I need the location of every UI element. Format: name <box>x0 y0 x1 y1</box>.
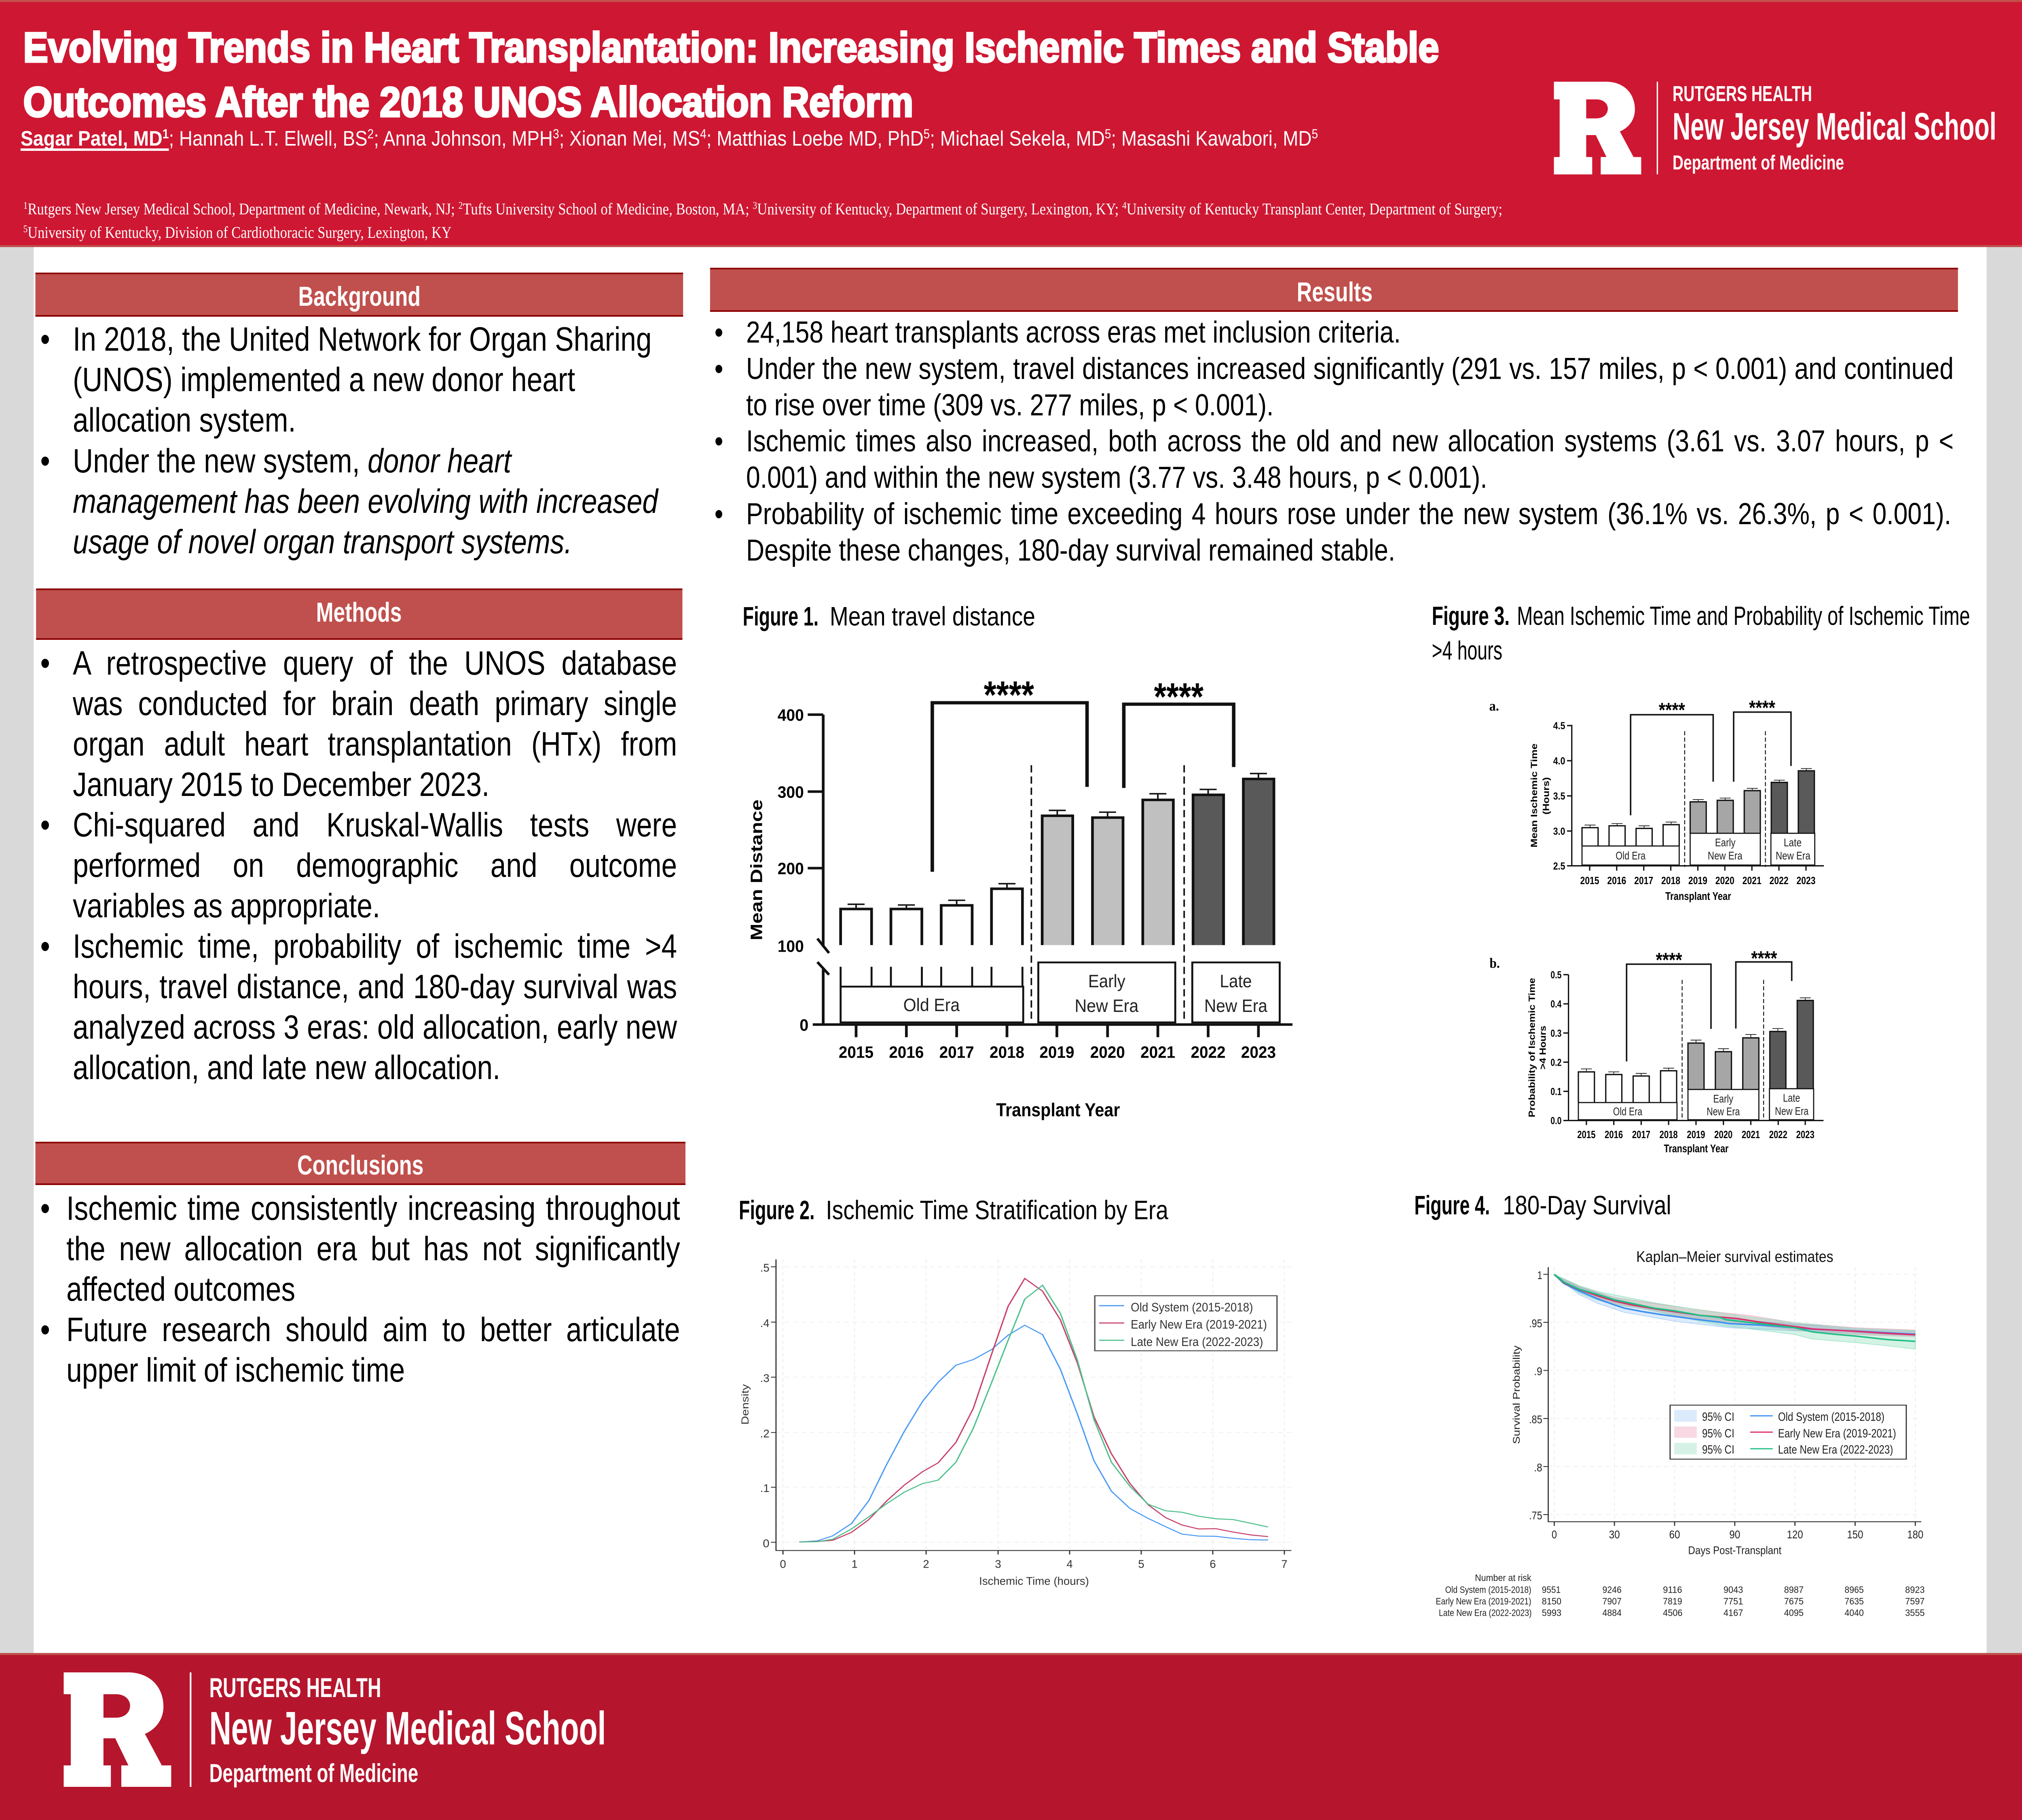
number at risk table: 8150 <box>1542 1596 1561 1607</box>
chart a: mean ischemic time: 2.5 <box>1553 860 1565 872</box>
number at risk table: 7597 <box>1905 1596 1925 1607</box>
chart a: mean ischemic time <box>1489 696 1824 902</box>
footer logo: Rutgers Health: Department of Medicine <box>209 1759 418 1788</box>
y axis: 300 <box>778 783 804 802</box>
survival axes: .85 <box>1529 1413 1542 1426</box>
curve: late new era <box>799 1285 1268 1542</box>
x axis: 2019 <box>1039 1043 1074 1062</box>
chart a: mean ischemic time: Mean Ischemic Time <box>1529 743 1539 847</box>
late new era bars <box>1193 779 1274 945</box>
chart b: probability of ischemic time over 4 hours: Probability of Ischemic Time <box>1527 978 1537 1117</box>
survival curve: old system <box>1554 1274 1915 1334</box>
methods text: A retrospective query of the UNOS database <box>73 644 677 682</box>
methods text: organ adult heart transplantation (HTx) from <box>73 725 677 763</box>
background text: usage of novel organ transport systems. <box>73 523 572 561</box>
figure 3 caption <box>1432 601 1970 665</box>
survival axes: Survival Probability <box>1511 1345 1522 1444</box>
density axes <box>740 1259 1291 1587</box>
era labels <box>841 963 1280 1022</box>
title <box>23 24 1439 126</box>
background heading: Background <box>298 281 421 312</box>
survival axes <box>1511 1267 1923 1557</box>
survival axes: .8 <box>1534 1461 1542 1474</box>
authors: ; Matthias Loebe MD, PhD <box>706 127 924 150</box>
y axis: Mean Distance <box>747 800 766 940</box>
authors: 2 <box>368 127 374 141</box>
number at risk table: Number at risk <box>1475 1573 1531 1583</box>
chart b: probability of ischemic time over 4 hours: New Era <box>1775 1105 1808 1117</box>
density axes: 6 <box>1210 1558 1216 1570</box>
results text <box>746 314 1954 569</box>
chart b: probability of ischemic time over 4 hours: 2016 <box>1605 1128 1623 1140</box>
chart b: probability of ischemic time over 4 hours: 0.4 <box>1550 998 1561 1010</box>
affiliations: Tufts University School of Medicine, Boston, MA; <box>463 200 753 218</box>
authors: ; Anna Johnson, MPH <box>374 127 553 150</box>
number at risk table: 8965 <box>1844 1585 1864 1595</box>
chart b: probability of ischemic time over 4 hours: >4 Hours <box>1538 1026 1548 1069</box>
background text: In 2018, the United Network for Organ Sharing <box>73 320 651 358</box>
x axis: 2022 <box>1191 1043 1226 1062</box>
figure 1 caption: Mean travel distance <box>830 601 1035 631</box>
chart b: probability of ischemic time over 4 hours: 2015 <box>1577 1128 1595 1140</box>
methods heading <box>36 588 683 640</box>
chart a: mean ischemic time: **** <box>1659 699 1685 722</box>
density axes: .2 <box>760 1427 770 1440</box>
figure 3 caption: Figure 3. <box>1432 601 1510 631</box>
panel: background: • <box>40 442 50 480</box>
conclusions text: Ischemic time consistently increasing throughout <box>66 1189 680 1227</box>
background text: allocation system. <box>73 401 296 439</box>
results text: to rise over time (309 vs. 277 miles, p < 0.001). <box>746 388 1273 422</box>
density legend: Old System (2015-2018) <box>1131 1300 1253 1314</box>
chart b: probability of ischemic time over 4 hours: New Era <box>1707 1106 1740 1118</box>
chart a: mean ischemic time: 2022 <box>1769 874 1788 887</box>
chart b: probability of ischemic time over 4 hours: **** <box>1751 947 1777 970</box>
significance brackets: **** <box>1154 675 1203 718</box>
methods text: was conducted for brain death primary single <box>73 685 677 722</box>
chart a: mean ischemic time: 3.0 <box>1553 825 1565 837</box>
density axes: 0 <box>780 1558 786 1570</box>
number at risk table: 4095 <box>1784 1608 1804 1618</box>
survival legend: 95% CI <box>1702 1427 1734 1440</box>
number at risk table <box>1436 1573 1925 1618</box>
chart b: probability of ischemic time over 4 hours: 2018 <box>1660 1128 1678 1140</box>
survival curve: early new era <box>1554 1274 1915 1335</box>
survival axes: 60 <box>1669 1528 1680 1541</box>
figure 4 caption <box>1414 1191 1671 1220</box>
chart a: mean ischemic time: a. <box>1489 698 1499 714</box>
authors: 1 <box>163 127 169 141</box>
background text: Under the new system, donor heart <box>73 442 511 480</box>
chart a: mean ischemic time: 4.5 <box>1553 720 1565 732</box>
results text: Ischemic times also increased, both across the old and new allocation systems (3.61 vs. 3.07 hours, p < <box>746 424 1954 458</box>
density axes: .4 <box>760 1317 770 1330</box>
density axes: 1 <box>851 1558 858 1570</box>
chart a: mean ischemic time: New Era <box>1776 850 1810 862</box>
chart b: probability of ischemic time over 4 hours: Early <box>1713 1093 1734 1105</box>
header logo: Rutgers Health: Department of Medicine <box>1673 151 1844 174</box>
number at risk table: Old System (2015-2018) <box>1445 1585 1531 1595</box>
header logo: Rutgers Health <box>1554 82 1997 174</box>
x axis: 2018 <box>990 1043 1024 1062</box>
figure 2: ischemic time density chart <box>739 1195 1291 1587</box>
chart b: probability of ischemic time over 4 hours: **** <box>1656 948 1682 971</box>
survival axes: 30 <box>1609 1528 1620 1541</box>
number at risk table: 4884 <box>1602 1608 1622 1618</box>
results text: Under the new system, travel distances increased significantly (291 vs. 157 miles, p < 0.001) and continued <box>746 351 1954 385</box>
panel: results: • <box>715 424 723 458</box>
chart b: probability of ischemic time over 4 hours: 2020 <box>1714 1128 1732 1140</box>
era labels: Early <box>1088 971 1125 991</box>
y axis: 0 <box>799 1016 808 1035</box>
figure 3: ischemic time bar charts <box>1432 601 1970 1155</box>
y axis: 100 <box>778 937 804 956</box>
methods text: Ischemic time, probability of ischemic time >4 <box>73 927 677 965</box>
authors: 5 <box>924 127 930 141</box>
conclusions heading <box>36 1142 685 1185</box>
methods text: hours, travel distance, and 180-day survival was <box>73 968 677 1005</box>
panel: conclusions <box>36 1142 685 1393</box>
survival legend: Old System (2015-2018) <box>1778 1410 1885 1424</box>
chart b: probability of ischemic time over 4 hours: 0.5 <box>1550 969 1561 981</box>
survival axes: 120 <box>1787 1528 1803 1541</box>
density axes: .5 <box>760 1262 770 1274</box>
survival legend: Late New Era (2022-2023) <box>1778 1443 1893 1456</box>
figure 1 caption: Figure 1. <box>743 601 819 631</box>
number at risk table: 9116 <box>1663 1585 1682 1595</box>
conclusions text: affected outcomes <box>66 1270 295 1308</box>
authors: ; Xionan Mei, MS <box>559 127 700 150</box>
number at risk table: 4167 <box>1724 1608 1743 1618</box>
footer logo: Rutgers Health: RUTGERS HEALTH <box>209 1672 381 1703</box>
affiliations <box>23 200 1502 241</box>
figure 2 caption <box>739 1195 1168 1225</box>
x axis: 2017 <box>939 1043 974 1062</box>
era labels: Old Era <box>903 995 960 1015</box>
error bars <box>848 774 1267 908</box>
x axis: 2021 <box>1140 1043 1175 1062</box>
survival axes: 90 <box>1729 1528 1740 1541</box>
panel: methods <box>36 588 683 1090</box>
conclusions text <box>66 1188 680 1390</box>
density axes: 5 <box>1138 1558 1144 1570</box>
panel: conclusions: • <box>40 1189 50 1227</box>
number at risk table: 7819 <box>1663 1596 1682 1607</box>
density axes: 3 <box>995 1558 1001 1570</box>
chart a: mean ischemic time: New Era <box>1708 850 1743 862</box>
number at risk table: 9246 <box>1602 1585 1622 1595</box>
authors: 5 <box>1105 127 1111 141</box>
chart b: probability of ischemic time over 4 hours: 0.0 <box>1550 1115 1561 1126</box>
affiliations: 3 <box>753 200 757 211</box>
number at risk table: 4506 <box>1663 1608 1682 1618</box>
chart a: mean ischemic time: Old Era <box>1616 850 1646 862</box>
chart b: probability of ischemic time over 4 hours: 0.2 <box>1550 1057 1561 1068</box>
chart b: probability of ischemic time over 4 hours: 2021 <box>1742 1128 1760 1140</box>
authors: 4 <box>700 127 706 141</box>
authors: Sagar Patel, MD <box>21 127 153 150</box>
title: Outcomes After the 2018 UNOS Allocation Reform <box>23 79 913 126</box>
chart a: mean ischemic time: Late <box>1784 837 1802 849</box>
number at risk table: 9043 <box>1724 1585 1743 1595</box>
chart a: mean ischemic time: 2021 <box>1743 874 1762 887</box>
title: Evolving Trends in Heart Transplantation: Increasing Ischemic Times and Stable <box>23 24 1439 71</box>
chart b: probability of ischemic time over 4 hours: 2022 <box>1769 1128 1787 1140</box>
number at risk table: 8923 <box>1905 1585 1925 1595</box>
results text: Probability of ischemic time exceeding 4 hours rose under the new system (36.1% vs. 26.3%, p < 0.001). <box>746 497 1951 531</box>
panel: methods: • <box>40 927 50 965</box>
number at risk table: 7907 <box>1602 1596 1622 1607</box>
affiliations: 2 <box>459 200 463 211</box>
figure 4: Kaplan-Meier survival chart <box>1414 1191 1925 1618</box>
chart a: mean ischemic time: Early <box>1715 837 1736 849</box>
chart b: probability of ischemic time over 4 hours: 2023 <box>1796 1128 1815 1140</box>
chart b: probability of ischemic time over 4 hours: b. <box>1489 956 1500 971</box>
panel: results: • <box>715 497 723 531</box>
panel: results: • <box>715 315 723 349</box>
significance brackets: **** <box>984 673 1034 717</box>
x axis: 2023 <box>1241 1043 1276 1062</box>
methods text <box>73 643 677 1088</box>
survival axes: .75 <box>1529 1509 1542 1522</box>
header logo: Rutgers Health: RUTGERS HEALTH <box>1673 82 1812 106</box>
early new era bars <box>1042 800 1173 945</box>
authors <box>21 127 1318 151</box>
conclusions text: Future research should aim to better articulate <box>66 1311 680 1348</box>
methods text: Chi-squared and Kruskal-Wallis tests were <box>73 806 677 844</box>
results heading <box>710 268 1958 312</box>
results text: 24,158 heart transplants across eras met inclusion criteria. <box>746 315 1401 349</box>
density axes: 7 <box>1281 1558 1288 1570</box>
figure 1 caption <box>743 601 1035 631</box>
footer logo: Rutgers Health <box>64 1672 606 1788</box>
methods text: variables as appropriate. <box>73 887 380 925</box>
era dividers <box>1031 765 1184 1022</box>
results text: 0.001) and within the new system (3.77 vs. 3.48 hours, p < 0.001). <box>746 460 1487 494</box>
background text: management has been evolving with increased <box>73 483 658 520</box>
survival legend: Early New Era (2019-2021) <box>1778 1427 1896 1440</box>
chart a: mean ischemic time: Transplant Year <box>1665 890 1731 902</box>
chart b: probability of ischemic time over 4 hours: 2017 <box>1632 1128 1650 1140</box>
chart b: probability of ischemic time over 4 hours: Late <box>1783 1092 1800 1105</box>
panel: methods: • <box>40 644 50 682</box>
chart a: mean ischemic time: 2018 <box>1661 874 1680 887</box>
affiliations: University of Kentucky Transplant Center, Department of Surgery; <box>1127 200 1502 218</box>
chart b: probability of ischemic time over 4 hours: Old Era <box>1613 1106 1642 1118</box>
panel: results: • <box>715 351 723 385</box>
figure 1: mean travel distance bar chart <box>743 601 1292 1120</box>
survival curve: late new era <box>1554 1274 1915 1342</box>
methods text: analyzed across 3 eras: old allocation, early new <box>73 1008 677 1046</box>
methods heading: Methods <box>316 597 402 628</box>
chart a: mean ischemic time: 2016 <box>1607 874 1626 887</box>
affiliations: University of Kentucky, Division of Cardiothoracic Surgery, Lexington, KY <box>27 223 452 241</box>
panel: results <box>710 268 1958 571</box>
chart b: probability of ischemic time over 4 hours: 2019 <box>1687 1128 1705 1140</box>
background text: (UNOS) implemented a new donor heart <box>73 361 575 398</box>
figure 2 caption: Figure 2. <box>739 1195 815 1225</box>
era labels: Late <box>1220 971 1252 991</box>
panel: background <box>36 273 683 568</box>
chart a: mean ischemic time: 2017 <box>1634 874 1653 887</box>
number at risk table: 7751 <box>1724 1596 1743 1607</box>
background heading <box>36 273 683 317</box>
chart a: mean ischemic time: 2015 <box>1580 874 1599 887</box>
density axes: .3 <box>760 1372 770 1385</box>
chart a: mean ischemic time: 3.5 <box>1553 790 1565 802</box>
density axes: .1 <box>760 1482 770 1495</box>
figure 3 caption: >4 hours <box>1432 636 1502 665</box>
density axes: 0 <box>763 1537 770 1550</box>
affiliations: Rutgers New Jersey Medical School, Department of Medicine, Newark, NJ; <box>27 200 459 218</box>
authors: 3 <box>553 127 559 141</box>
methods text: January 2015 to December 2023. <box>73 766 489 803</box>
x axis: Transplant Year <box>996 1100 1120 1120</box>
density axes: Ischemic Time (hours) <box>979 1575 1089 1587</box>
y axis <box>747 706 829 1035</box>
confidence bands <box>1554 1274 1915 1349</box>
results heading: Results <box>1297 277 1373 307</box>
number at risk table: 8987 <box>1784 1585 1804 1595</box>
affiliations: 1 <box>23 200 27 211</box>
footer banner <box>0 1653 2022 1820</box>
authors: ; Hannah L.T. Elwell, BS <box>169 127 357 150</box>
affiliations: 4 <box>1122 200 1127 211</box>
x axis: 2015 <box>839 1043 874 1062</box>
panel: methods: • <box>40 806 50 844</box>
conclusions text: upper limit of ischemic time <box>66 1351 405 1389</box>
chart a: mean ischemic time: 4.0 <box>1553 755 1565 767</box>
number at risk table: 7635 <box>1844 1596 1864 1607</box>
survival legend: 95% CI <box>1702 1443 1734 1456</box>
x axis <box>813 1024 1292 1120</box>
figure 4 caption: 180-Day Survival <box>1503 1191 1671 1220</box>
results text: Despite these changes, 180-day survival remained stable. <box>746 533 1395 567</box>
density legend: Late New Era (2022-2023) <box>1131 1335 1263 1349</box>
chart a: mean ischemic time: 2020 <box>1715 874 1734 887</box>
number at risk table: 9551 <box>1542 1585 1561 1595</box>
era labels: New Era <box>1074 995 1139 1016</box>
number at risk table: 4040 <box>1844 1608 1864 1618</box>
curve: early new era <box>799 1278 1268 1542</box>
survival axes: 0 <box>1552 1528 1557 1541</box>
background text <box>73 319 657 562</box>
affiliations: 5 <box>23 224 27 235</box>
figure 2 caption: Ischemic Time Stratification by Era <box>826 1195 1168 1225</box>
curve: old system <box>799 1325 1268 1542</box>
conclusions text: the new allocation era but has not significantly <box>66 1230 680 1268</box>
figure 4 caption: Figure 4. <box>1414 1191 1490 1220</box>
density axes: Density <box>740 1384 751 1425</box>
x axis: 2016 <box>889 1043 924 1062</box>
header banner <box>0 0 2022 247</box>
chart a: mean ischemic time: 2023 <box>1796 874 1815 887</box>
chart b: probability of ischemic time over 4 hours: 0.1 <box>1550 1086 1561 1097</box>
survival legend <box>1670 1405 1906 1459</box>
chart b: probability of ischemic time over 4 hours: 0.3 <box>1550 1027 1561 1039</box>
old era bars <box>841 889 1022 945</box>
number at risk table: Early New Era (2019-2021) <box>1436 1596 1531 1607</box>
y axis: 400 <box>778 706 804 725</box>
authors: ; Michael Sekela, MD <box>930 127 1105 150</box>
number at risk table: 3555 <box>1905 1608 1925 1618</box>
chart b: probability of ischemic time over 4 hours <box>1489 947 1823 1155</box>
conclusions heading: Conclusions <box>297 1150 424 1181</box>
authors: 5 <box>1312 127 1318 141</box>
number at risk table: Late New Era (2022-2023) <box>1439 1608 1532 1618</box>
survival axes: 180 <box>1907 1528 1923 1541</box>
survival axes: 150 <box>1847 1528 1863 1541</box>
density legend: Early New Era (2019-2021) <box>1131 1317 1267 1331</box>
density legend <box>1095 1296 1277 1351</box>
chart title: Kaplan–Meier survival estimates <box>1636 1249 1833 1266</box>
chart a: mean ischemic time: **** <box>1749 696 1776 719</box>
x axis: 2020 <box>1090 1043 1125 1062</box>
chart b: probability of ischemic time over 4 hours: Transplant Year <box>1664 1143 1728 1155</box>
survival legend: 95% CI <box>1702 1410 1734 1424</box>
density axes: 2 <box>923 1558 929 1570</box>
panel: background: • <box>40 320 50 358</box>
survival axes: .9 <box>1534 1365 1542 1378</box>
y axis: 200 <box>778 859 804 878</box>
survival axes: .95 <box>1529 1317 1542 1330</box>
number at risk table: 5993 <box>1542 1608 1561 1618</box>
chart a: mean ischemic time: (Hours) <box>1541 777 1551 815</box>
survival axes: Days Post-Transplant <box>1688 1544 1781 1557</box>
authors: ; Masashi Kawabori, MD <box>1111 127 1312 150</box>
panel: conclusions: • <box>40 1311 50 1348</box>
affiliations: University of Kentucky, Department of Surgery, Lexington, KY; <box>757 200 1122 218</box>
survival axes: 1 <box>1538 1269 1542 1282</box>
significance brackets <box>932 673 1234 872</box>
number at risk table: 7675 <box>1784 1596 1804 1607</box>
methods text: performed on demographic and outcome <box>73 847 677 884</box>
methods text: allocation, and late new allocation. <box>73 1049 500 1086</box>
density axes: 4 <box>1066 1558 1073 1570</box>
footer logo: Rutgers Health: New Jersey Medical School <box>209 1702 606 1754</box>
era labels: New Era <box>1204 995 1267 1016</box>
chart a: mean ischemic time: 2019 <box>1688 874 1707 887</box>
